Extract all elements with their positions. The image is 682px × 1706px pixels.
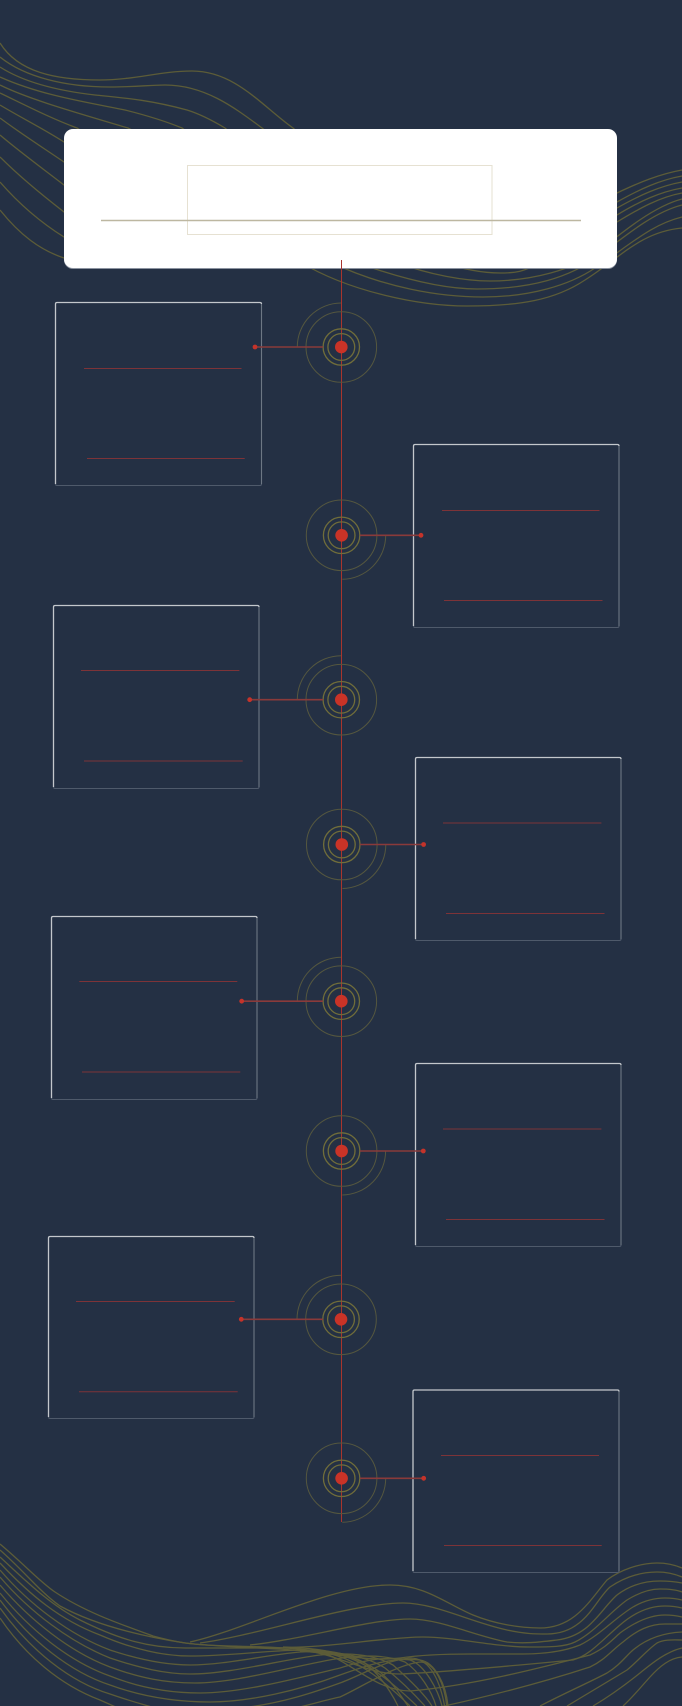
timeline node 2 <box>306 500 423 579</box>
panel: card 5 <box>52 916 257 1100</box>
panel: card 1 <box>56 302 262 486</box>
timeline node 7 <box>239 1275 376 1355</box>
timeline node 6 <box>306 1116 426 1195</box>
timeline node 5 <box>239 957 377 1036</box>
panel: card 3 <box>54 606 259 788</box>
panel: title card <box>64 129 617 269</box>
panel: card 2 <box>414 444 619 628</box>
timeline node 1 <box>253 303 377 382</box>
bottom contour waves <box>0 1544 682 1706</box>
panel: card 7 <box>48 1236 254 1418</box>
title frame <box>188 166 492 234</box>
timeline spine <box>340 260 342 1522</box>
panel: card 6 <box>416 1064 621 1246</box>
timeline node 8 <box>306 1443 426 1522</box>
timeline node 4 <box>306 809 426 888</box>
top contour waves <box>0 43 682 306</box>
title underline <box>101 220 581 222</box>
panel: card 8 <box>413 1390 619 1572</box>
timeline node 3 <box>247 656 377 735</box>
panel: card 4 <box>416 758 621 940</box>
